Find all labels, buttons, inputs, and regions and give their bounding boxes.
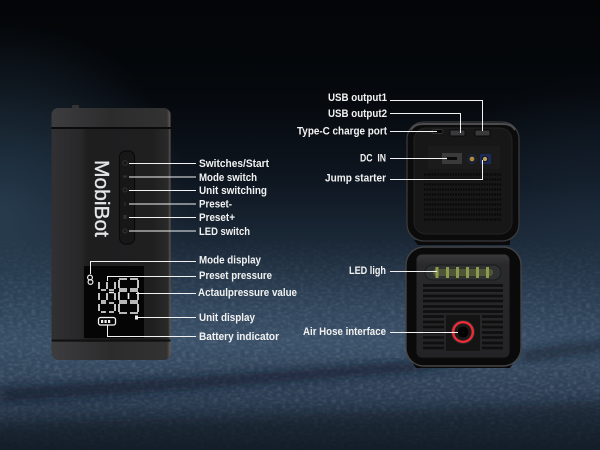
icon: unit display <box>135 316 138 320</box>
labels: left device callouts: Actaulpressure value <box>198 287 297 299</box>
icon: mode display <box>88 275 93 284</box>
labels: left device callouts: Mode switch <box>199 172 257 184</box>
port: jump starter terminals <box>468 154 491 164</box>
labels: right device callouts <box>297 92 387 338</box>
speaker grille: upper <box>424 174 502 220</box>
speaker grille: lower <box>423 286 503 348</box>
labels: left device callouts: Unit switching <box>199 185 267 197</box>
digits: preset pressure <box>99 282 115 312</box>
right device: rear ports <box>407 122 519 245</box>
labels: right device callouts: USB output2 <box>328 108 387 120</box>
labels: left device callouts: Switches/Start <box>199 158 269 170</box>
labels: right device callouts: Jump starter <box>325 172 387 184</box>
digits: actual pressure <box>119 279 138 313</box>
button strip <box>120 151 134 244</box>
labels: left device callouts: Mode display <box>199 254 262 266</box>
labels: right device callouts: Type-C charge port <box>297 126 387 138</box>
air hose square <box>446 315 480 351</box>
labels: right device callouts: Air Hose interface <box>303 326 386 338</box>
LCD screen <box>84 266 144 338</box>
labels: left device callouts: LED switch <box>199 226 250 238</box>
labels: right device callouts: USB output1 <box>328 92 387 104</box>
air hose ring <box>451 320 475 344</box>
labels: right device callouts: LED ligh <box>349 265 386 277</box>
labels: left device callouts: Preset- <box>199 198 232 210</box>
right device: front with LED and hose <box>406 247 521 368</box>
port: Type-C <box>432 130 443 134</box>
leader lines <box>90 100 482 336</box>
left device: front view <box>52 105 170 360</box>
LED light bar <box>425 265 501 280</box>
labels: right device callouts: DC IN <box>360 152 386 164</box>
icon: battery indicator <box>98 318 116 325</box>
labels: left device callouts: Battery indicator <box>199 331 280 343</box>
brand name: MobiBot: MobiBot <box>90 160 112 237</box>
labels: left device callouts: Preset pressure <box>199 270 272 282</box>
port: DC in <box>442 153 462 164</box>
port: USB 2 <box>450 130 465 136</box>
port: USB 1 <box>475 130 490 136</box>
labels: left device callouts <box>198 158 297 343</box>
labels: left device callouts: Unit display <box>199 312 256 324</box>
labels: left device callouts: Preset+ <box>199 212 235 224</box>
